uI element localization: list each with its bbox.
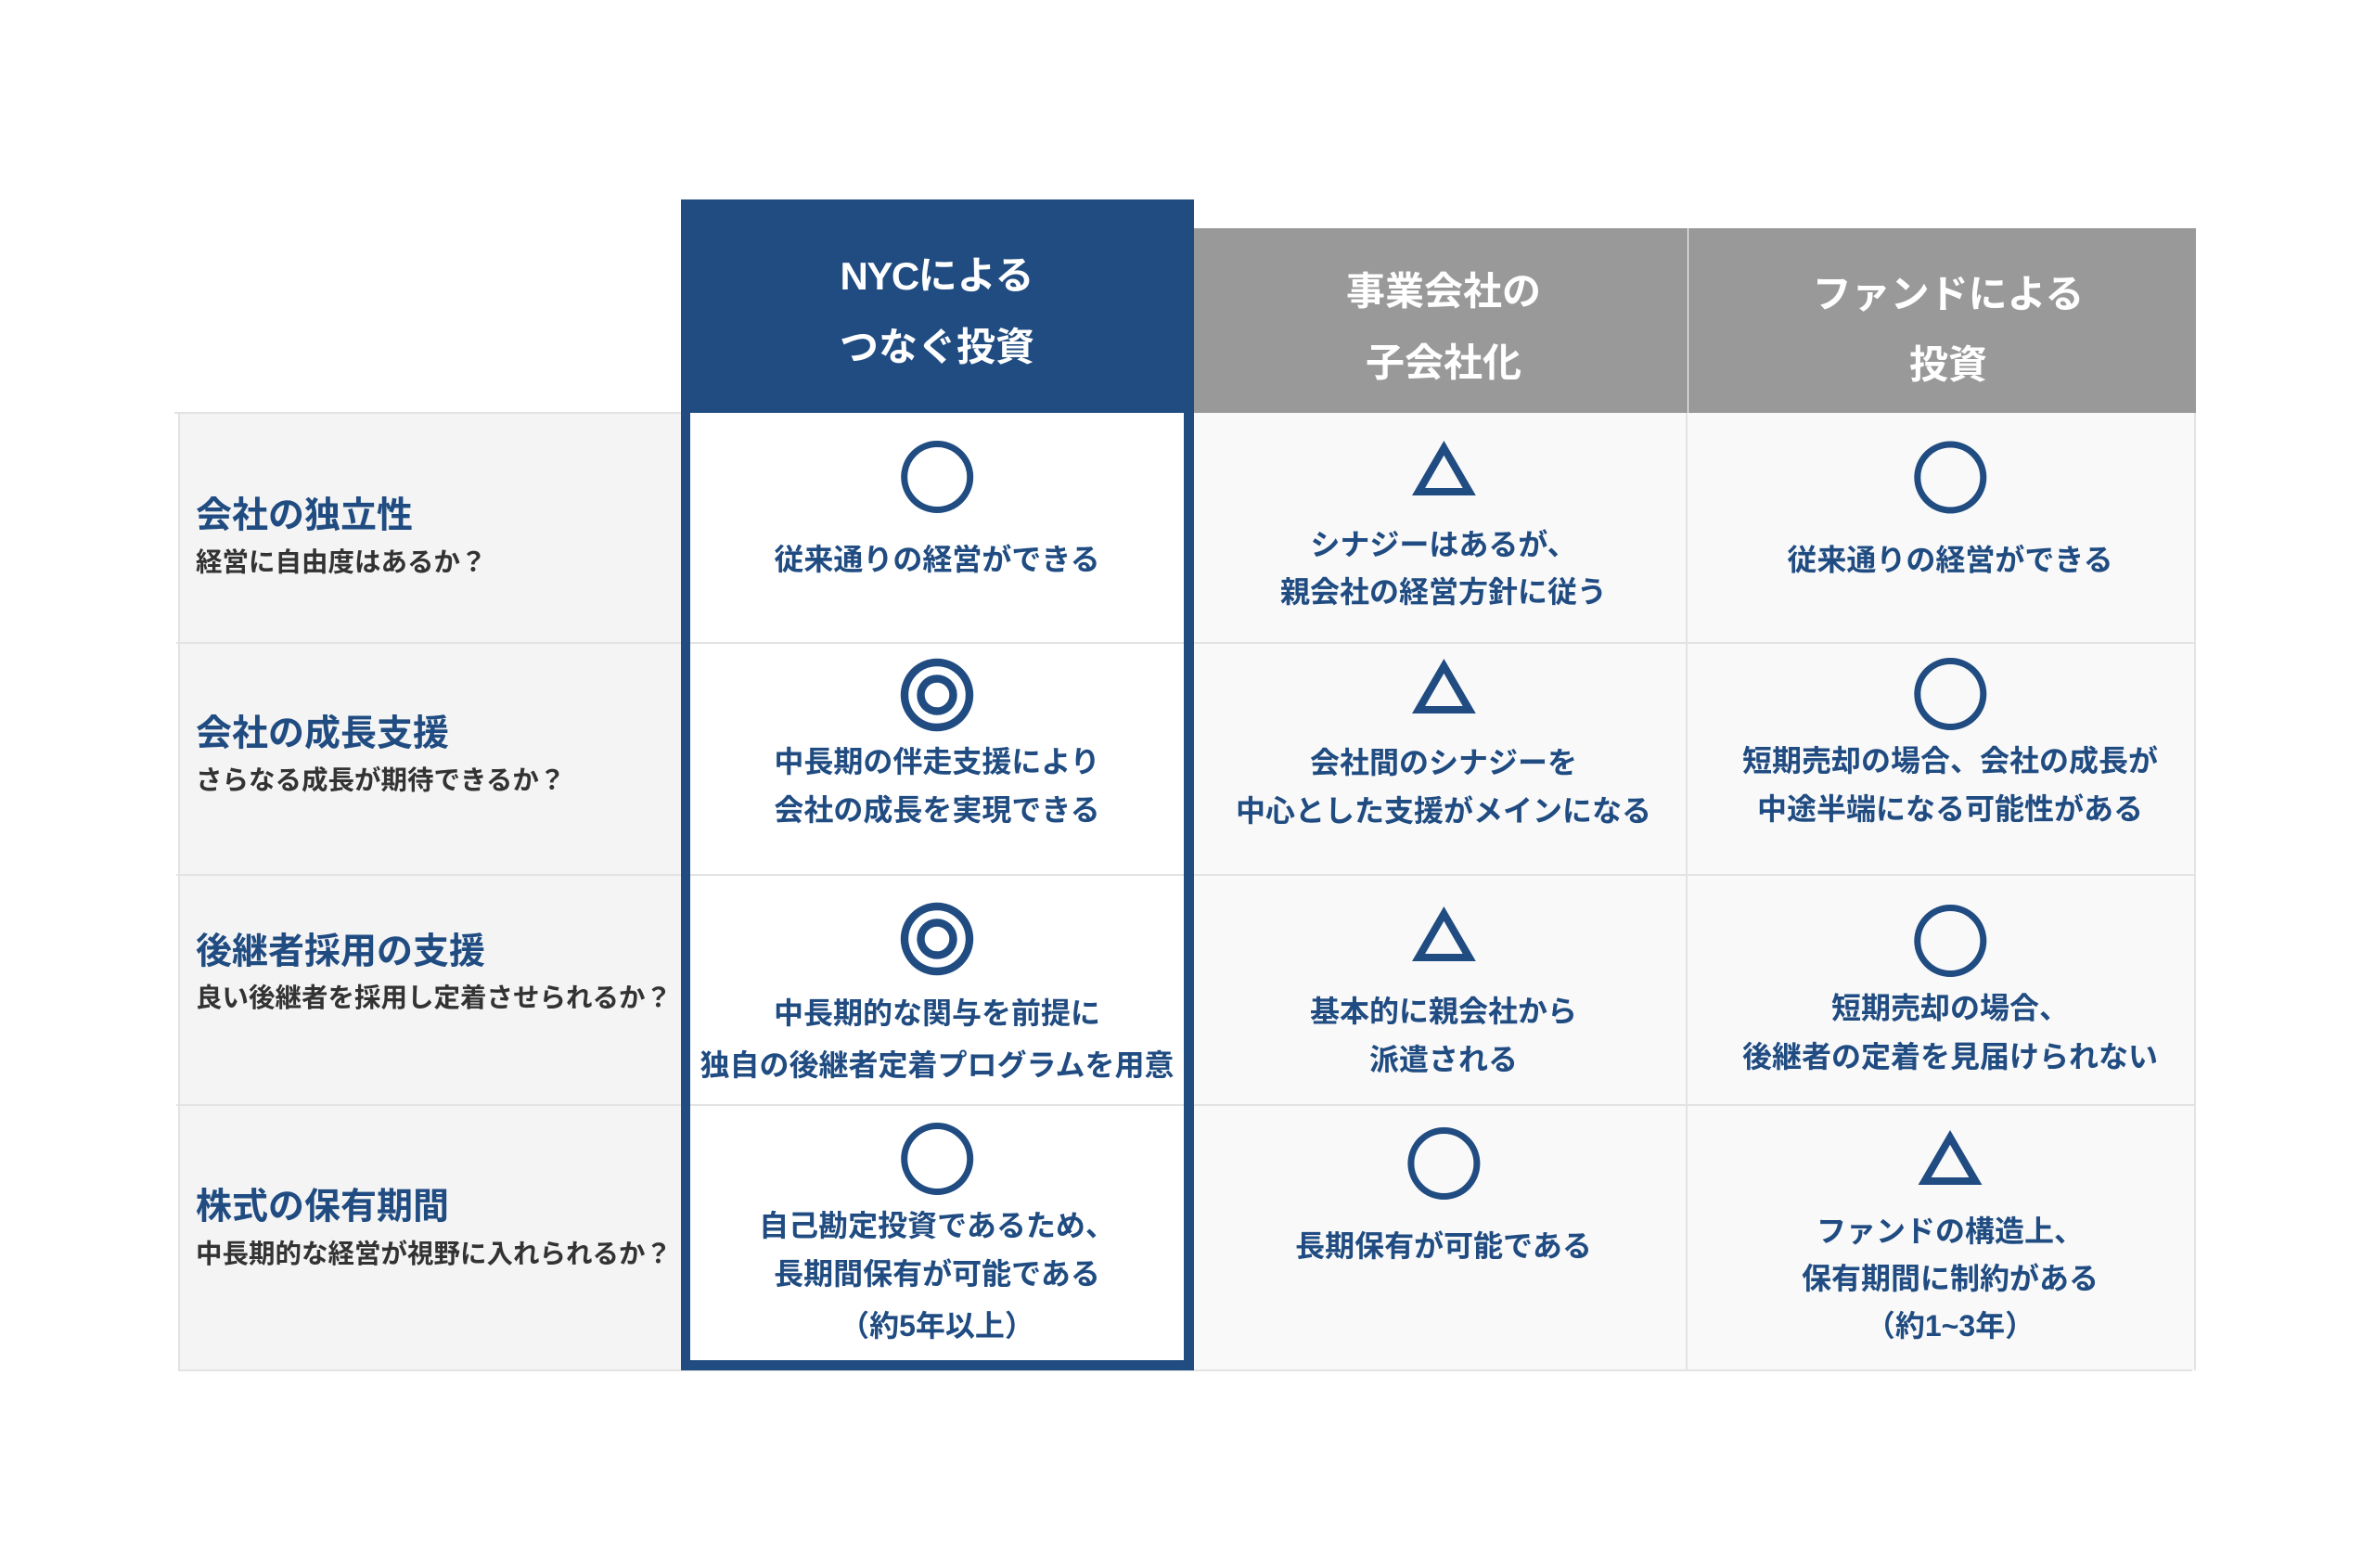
heading: operating company column header: 事業会社の [1346, 269, 1541, 314]
cell: NYC independence: 従来通りの経営ができる [774, 543, 1100, 576]
cell: company independence: 親会社の経営方針に従う [1280, 575, 1607, 609]
cell: company growth support: 会社間のシナジーを [1310, 746, 1577, 779]
cell: fund successor hiring [1742, 907, 2158, 1073]
row label: independence [196, 495, 487, 577]
cell: NYC growth support: 会社の成長を実現できる [774, 793, 1100, 827]
row label: independence: 会社の独立性 [196, 495, 413, 536]
heading: operating company column header [1194, 228, 1688, 413]
row label: successor hiring: 良い後継者を採用し定着させられるか？ [196, 983, 672, 1013]
row label: holding period [196, 1188, 672, 1269]
cell: company successor hiring: 派遣される [1369, 1043, 1518, 1076]
cell: fund successor hiring: 短期売却の場合、 [1831, 991, 2069, 1024]
cell: fund growth support: 短期売却の場合、会社の成長が [1742, 744, 2158, 778]
heading: NYC column header: つなぐ投資 [840, 325, 1034, 369]
heading: NYC column header [681, 199, 1194, 413]
icon: double circle [905, 906, 969, 971]
heading: fund investment column header [1688, 228, 2196, 413]
cell: NYC growth support [774, 662, 1100, 827]
cell: fund independence [1787, 444, 2113, 577]
cell: company holding period: 長期保有が可能である [1295, 1229, 1592, 1263]
cell: fund successor hiring: 後継者の定着を見届けられない [1742, 1040, 2158, 1073]
cell: fund growth support [1742, 661, 2158, 826]
cell: company growth support: 中心とした支援がメインになる [1236, 794, 1651, 828]
cell: NYC successor hiring [700, 906, 1175, 1082]
cell: fund growth support: 中途半端になる可能性がある [1757, 792, 2143, 826]
icon: triangle [1412, 906, 1476, 961]
cell: fund holding period [1802, 1130, 2099, 1343]
icon: double circle [905, 662, 969, 727]
cell: company successor hiring [1310, 906, 1577, 1076]
cell: fund independence: 従来通りの経営ができる [1787, 544, 2113, 577]
icon: circle [1918, 661, 1983, 727]
icon: circle [905, 443, 970, 510]
cell: NYC successor hiring: 独自の後継者定着プログラムを用意 [700, 1048, 1175, 1082]
cell: fund holding period: ファンドの構造上、 [1817, 1215, 2084, 1248]
cell: company independence: シナジーはあるが、 [1310, 528, 1577, 561]
heading: fund investment column header: ファンドによる [1813, 273, 2084, 315]
row label: holding period: 株式の保有期間 [196, 1188, 449, 1227]
icon: triangle [1919, 1130, 1982, 1185]
heading: operating company column header: 子会社化 [1366, 341, 1521, 384]
panel: comparison cells background [176, 413, 2196, 1371]
row label: growth support: さらなる成長が期待できるか？ [196, 765, 565, 796]
panel: highlighted NYC column frame [681, 413, 1194, 1370]
cell: NYC independence [774, 443, 1100, 576]
cell: NYC holding period: 自己勘定投資であるため、 [759, 1209, 1115, 1242]
heading: fund investment column header: 投資 [1909, 343, 1987, 386]
cell: NYC holding period: 長期間保有が可能である [774, 1257, 1100, 1291]
cell: NYC growth support: 中長期の伴走支援により [774, 745, 1100, 778]
icon: circle [905, 1126, 970, 1191]
row label: successor hiring [196, 932, 672, 1013]
icon: circle [1918, 907, 1983, 974]
panel: row label column background [174, 412, 681, 1371]
row label: growth support [196, 714, 565, 796]
icon: triangle [1412, 441, 1476, 495]
icon: circle [1411, 1130, 1477, 1197]
cell: company independence [1280, 441, 1607, 609]
cell: fund holding period: （約1~3年） [1866, 1309, 2035, 1343]
cell: company successor hiring: 基本的に親会社から [1310, 995, 1577, 1028]
row label: independence: 経営に自由度はあるか？ [196, 547, 487, 577]
cell: NYC successor hiring: 中長期的な関与を前提に [774, 996, 1100, 1030]
cell: NYC holding period: （約5年以上） [840, 1309, 1034, 1343]
heading: NYC column header: NYCによる [841, 254, 1033, 297]
cell: company growth support [1236, 659, 1651, 828]
cell: company holding period [1295, 1130, 1592, 1263]
cell: NYC holding period [759, 1126, 1115, 1343]
row label: successor hiring: 後継者採用の支援 [196, 932, 485, 972]
row label: growth support: 会社の成長支援 [196, 714, 449, 753]
icon: triangle [1412, 659, 1476, 713]
icon: circle [1918, 444, 1983, 510]
row label: holding period: 中長期的な経営が視野に入れられるか？ [196, 1239, 672, 1269]
cell: fund holding period: 保有期間に制約がある [1802, 1262, 2099, 1295]
